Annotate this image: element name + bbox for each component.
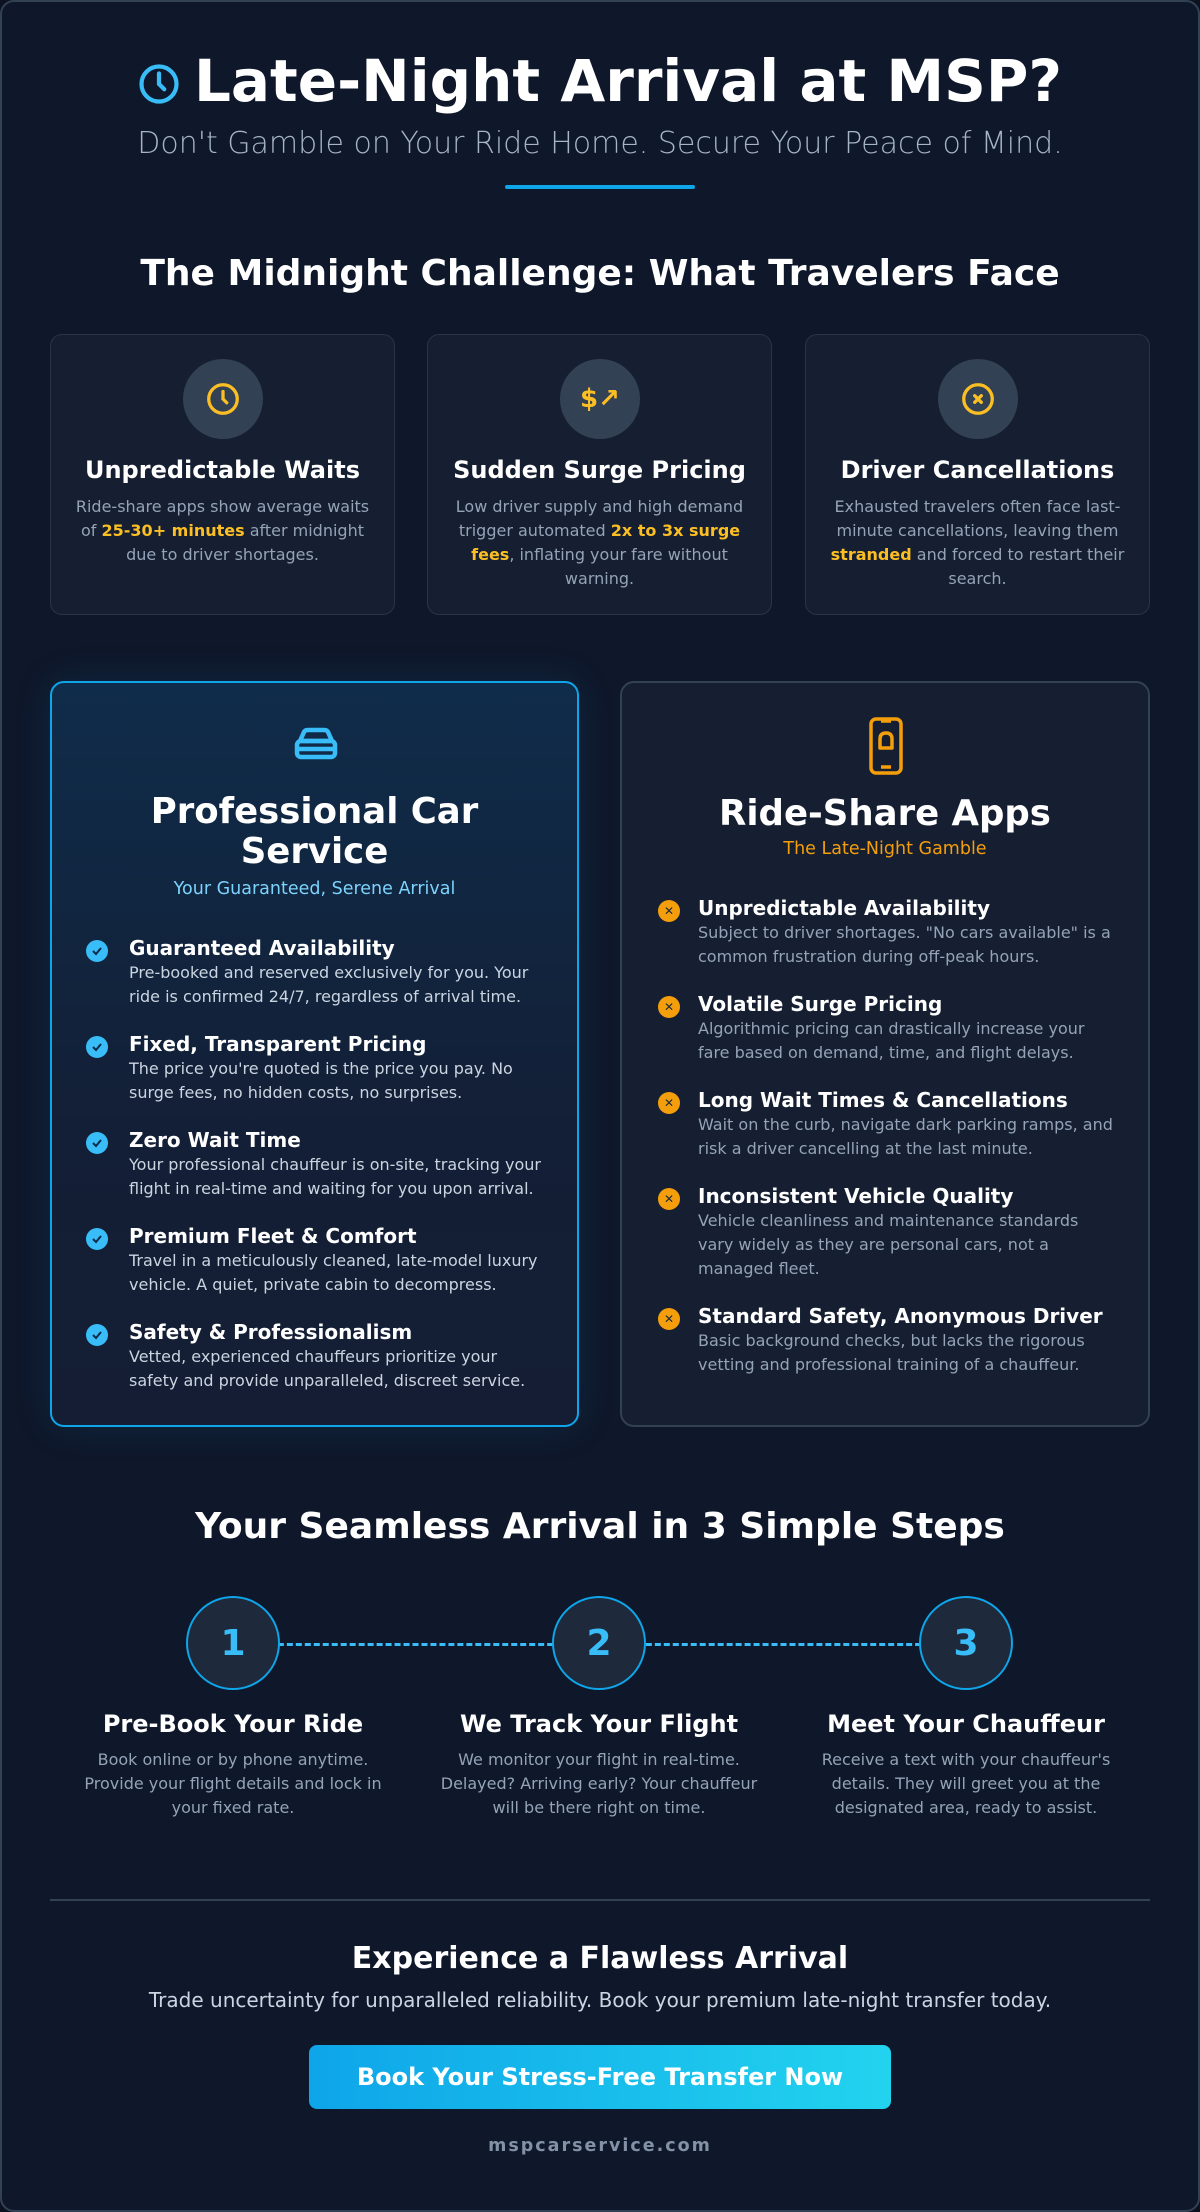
list: benefits: Premium Fleet & Comfort <box>129 1224 417 1248</box>
icon: surge: $↗ <box>580 384 620 414</box>
list: drawbacks: ✕ <box>664 1192 674 1206</box>
step 2 number <box>552 1596 646 1690</box>
list: benefits: surge fees, no hidden costs, no surprises. <box>129 1083 462 1102</box>
heading: midnight challenge: The Midnight Challenge: What Travelers Face <box>140 253 1060 294</box>
list: drawbacks: ✕ <box>664 1312 674 1326</box>
icon: surge <box>560 359 640 439</box>
icon: clock <box>139 64 179 104</box>
list: drawbacks: Wait on the curb, navigate dark parking ramps, and <box>698 1115 1113 1134</box>
list: drawbacks: ✕ <box>664 904 674 918</box>
heading: steps: Your Seamless Arrival in 3 Simple Steps <box>195 1506 1005 1547</box>
step 1 text: Book online or by phone anytime. <box>98 1750 368 1769</box>
step 3 number: 3 <box>953 1622 979 1664</box>
list: drawbacks: common frustration during off-peak hours. <box>698 947 1039 966</box>
list: drawbacks: Inconsistent Vehicle Quality <box>698 1184 1013 1208</box>
list: drawbacks: Standard Safety, Anonymous Driver <box>698 1304 1103 1328</box>
step 3 text: Receive a text with your chauffeur's <box>822 1750 1110 1769</box>
step 3 text: details. They will greet you at the <box>832 1774 1100 1793</box>
step 1 text: your fixed rate. <box>172 1798 294 1817</box>
connector: dashed line <box>233 1643 966 1646</box>
subtitle: The Late-Night Gamble <box>783 839 987 859</box>
list: drawbacks: managed fleet. <box>698 1259 820 1278</box>
list: benefits: Pre-booked and reserved exclusively for you. Your <box>129 963 528 982</box>
step 3 number <box>919 1596 1013 1690</box>
list: drawbacks: vetting and professional training of a chauffeur. <box>698 1355 1079 1374</box>
step 3 text: Meet Your Chauffeur <box>827 1710 1105 1738</box>
title: Ride-Share Apps <box>719 793 1051 834</box>
button: Book Your Stress-Free Transfer Now <box>357 2063 843 2091</box>
footer url: mspcarservice.com <box>488 2136 712 2156</box>
step 1 number: 1 <box>220 1622 246 1664</box>
panel: cancellations: Driver Cancellations <box>841 456 1114 484</box>
panel: professional car service <box>50 681 579 1427</box>
list: drawbacks: Vehicle cleanliness and maintenance standards <box>698 1211 1078 1230</box>
step 1 text: Provide your flight details and lock in <box>84 1774 382 1793</box>
step 2 text <box>441 1710 758 1817</box>
step 2 text: will be there right on time. <box>493 1798 705 1817</box>
step 1 text <box>84 1710 382 1817</box>
step 3 text <box>822 1710 1110 1817</box>
title: Service <box>241 831 388 872</box>
button <box>309 2045 891 2109</box>
list: drawbacks <box>658 896 1113 1374</box>
panel: cancellations <box>805 334 1150 615</box>
panel: ride-share apps <box>620 681 1150 1427</box>
list: benefits: Your professional chauffeur is on-site, tracking your <box>129 1155 541 1174</box>
subtitle: Don't Gamble on Your Ride Home. Secure Your Peace of Mind. <box>137 126 1063 161</box>
list: benefits: vehicle. A quiet, private cabin to decompress. <box>129 1275 497 1294</box>
list: drawbacks: ✕ <box>664 1000 674 1014</box>
icon: phone <box>869 717 903 775</box>
subtitle: Your Guaranteed, Serene Arrival <box>174 879 455 899</box>
step 2 text: We Track Your Flight <box>460 1710 738 1738</box>
CTA text: Trade uncertainty for unparalleled reliability. Book your premium late-night transfer today. <box>149 1988 1051 2012</box>
list: benefits: Zero Wait Time <box>129 1128 301 1152</box>
list: drawbacks: Basic background checks, but lacks the rigorous <box>698 1331 1085 1350</box>
list: drawbacks: risk a driver cancelling at the last minute. <box>698 1139 1033 1158</box>
step 3 text: designated area, ready to assist. <box>835 1798 1097 1817</box>
step 1 text: Pre-Book Your Ride <box>103 1710 363 1738</box>
list: benefits: safety and provide unparalleled, discreet service. <box>129 1371 525 1390</box>
list: benefits: Safety & Professionalism <box>129 1320 412 1344</box>
list: drawbacks: Long Wait Times & Cancellations <box>698 1088 1068 1112</box>
icon: car <box>294 728 338 760</box>
heading: CTA: Experience a Flawless Arrival <box>352 1941 848 1976</box>
list: drawbacks: vary widely as they are personal cars, not a <box>698 1235 1049 1254</box>
list: benefits: Guaranteed Availability <box>129 936 395 960</box>
title: Late-Night Arrival at MSP? <box>194 47 1062 115</box>
icon: clock <box>183 359 263 439</box>
panel: unpredictable waits: Ride-share apps show average waits of 25-30+ minutes after midnight due to driver shortages. <box>76 497 369 564</box>
step 1 number <box>186 1596 280 1690</box>
step 2 number: 2 <box>586 1622 612 1664</box>
panel: cancellations: Exhausted travelers often face last-minute cancellations, leaving them stranded and forced to restart their search. <box>831 497 1124 588</box>
list: drawbacks: fare based on demand, time, and flight delays. <box>698 1043 1074 1062</box>
step 2 text: Delayed? Arriving early? Your chauffeur <box>441 1774 757 1793</box>
icon: x circle <box>938 359 1018 439</box>
list: benefits: The price you're quoted is the price you pay. No <box>129 1059 513 1078</box>
list: drawbacks: Subject to driver shortages. "No cars available" is a <box>698 923 1111 942</box>
list: drawbacks: Volatile Surge Pricing <box>698 992 942 1016</box>
panel: unpredictable waits <box>50 334 395 615</box>
list: drawbacks: ✕ <box>664 1096 674 1110</box>
list: benefits: Fixed, Transparent Pricing <box>129 1032 426 1056</box>
list: drawbacks: Algorithmic pricing can drastically increase your <box>698 1019 1084 1038</box>
list: drawbacks: Unpredictable Availability <box>698 896 990 920</box>
step 2 text: We monitor your flight in real-time. <box>458 1750 740 1769</box>
panel: surge pricing <box>427 334 772 615</box>
panel: surge pricing: Low driver supply and high demand trigger automated 2x to 3x surge fees, inflating your fare without warning. <box>456 497 743 588</box>
title: Professional Car <box>151 791 478 832</box>
title <box>151 791 478 872</box>
list: benefits <box>86 936 541 1390</box>
list: benefits: ride is confirmed 24/7, regardless of arrival time. <box>129 987 521 1006</box>
list: benefits: Travel in a meticulously cleaned, late-model luxury <box>129 1251 538 1270</box>
list: benefits: Vetted, experienced chauffeurs prioritize your <box>129 1347 497 1366</box>
panel: surge pricing: Sudden Surge Pricing <box>453 456 746 484</box>
panel: unpredictable waits: Unpredictable Waits <box>85 456 360 484</box>
list: benefits: flight in real-time and waiting for you upon arrival. <box>129 1179 534 1198</box>
